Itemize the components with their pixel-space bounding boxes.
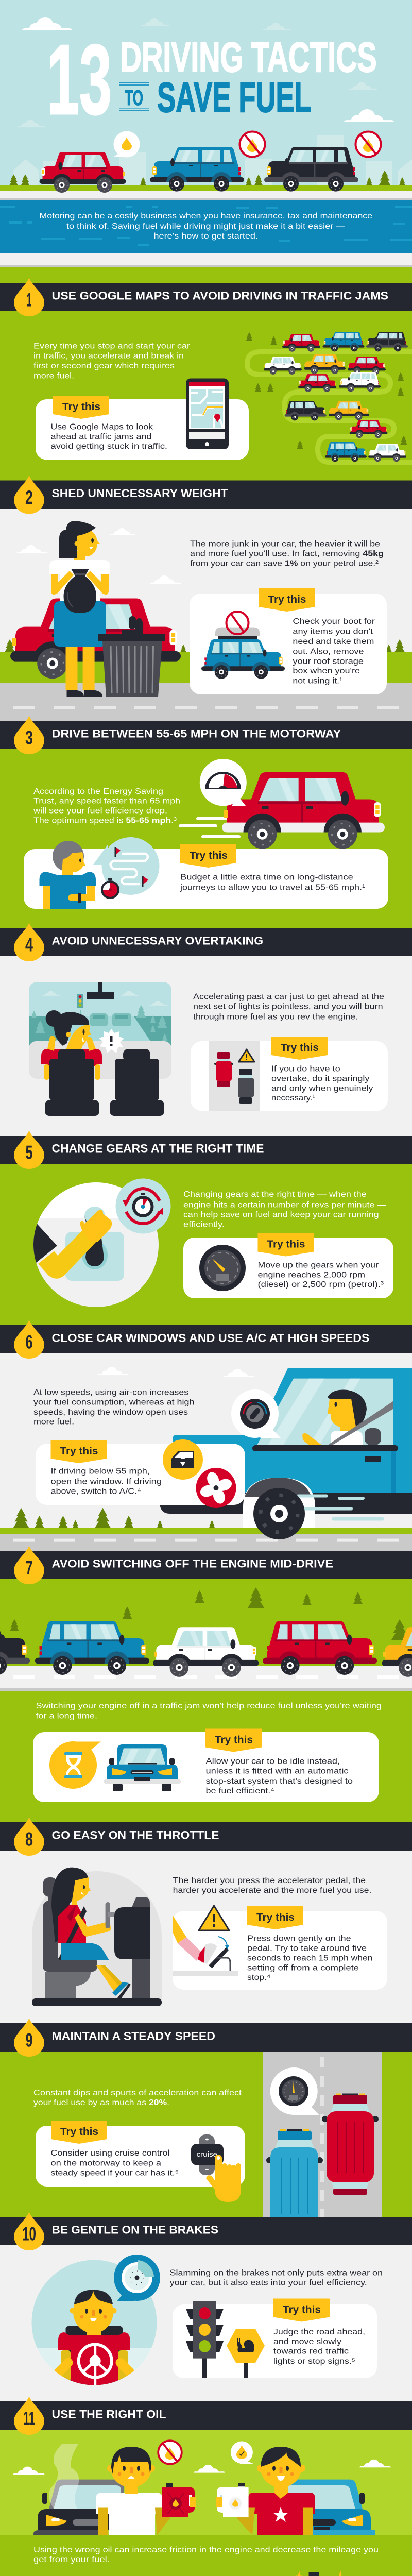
road bbox=[0, 1666, 412, 1691]
body text: Switching your engine off in a traffic jam won't help reduce fuel unless you're waiting bbox=[36, 1702, 382, 1710]
body text: your fuel consumption, whereas at high bbox=[33, 1398, 195, 1407]
number drop: 4 bbox=[25, 935, 33, 956]
try this card: Try this bbox=[60, 2126, 98, 2138]
panel: section 2 shed weight bbox=[0, 475, 412, 721]
panel: section 1 traffic jams bbox=[0, 267, 412, 481]
body text: your fuel use by as much as 20%. bbox=[33, 2098, 169, 2107]
body text: and more fuel you'll use. In fact, removing 45kg bbox=[190, 549, 384, 558]
body text: Slamming on the brakes not only puts extra wear on bbox=[170, 2268, 383, 2277]
body text: engine hits a certain number of revs per minute — bbox=[183, 1200, 386, 1209]
body text: Trust, any speed faster than 65 mph bbox=[33, 797, 180, 806]
body text bbox=[36, 1702, 382, 1720]
number drop: 2 bbox=[25, 487, 33, 508]
body text: Changing gears at the right time — when the bbox=[183, 1190, 367, 1199]
icon: phone with map bbox=[186, 378, 229, 449]
number drop: 8 bbox=[25, 1829, 33, 1850]
lane dashes bbox=[320, 2057, 324, 2217]
body text: will see your fuel efficiency drop. bbox=[33, 807, 167, 816]
happy man with white can bbox=[216, 2447, 315, 2535]
dark car with steam bbox=[33, 2444, 134, 2535]
number drop bbox=[14, 1320, 44, 1359]
body text: The optimum speed is 55-65 mph .³ bbox=[33, 816, 177, 825]
try this card: box when you're bbox=[293, 667, 360, 675]
icon: brake disc bubble bbox=[114, 2255, 160, 2301]
body text: Using the wrong oil can increase friction in the engine and decrease the mileage you bbox=[33, 2546, 379, 2554]
try this card: Try this bbox=[190, 850, 228, 861]
icon: blue oil can bbox=[290, 2570, 371, 2576]
icon: route bubble with stopwatch bbox=[93, 837, 160, 899]
rubbish bin bbox=[98, 616, 165, 697]
title: TO bbox=[125, 86, 143, 110]
body text: The more junk in your car, the heavier it will be bbox=[190, 539, 380, 548]
try this card: unless it is fitted with an automatic bbox=[206, 1767, 348, 1775]
icon: fan bbox=[196, 1468, 236, 1508]
try this card: journeys to allow you to travel at 55-65 mph.¹ bbox=[180, 883, 365, 892]
heading: MAINTAIN A STEADY SPEED bbox=[52, 2030, 215, 2042]
panel: section 4 overtaking bbox=[0, 923, 412, 1136]
number drop bbox=[14, 2018, 44, 2057]
try this card bbox=[36, 1440, 245, 1505]
body text: According to the Energy Saving bbox=[33, 787, 163, 796]
try this card: avoid getting stuck in traffic. bbox=[50, 442, 167, 451]
driver with wheel bbox=[31, 2259, 160, 2388]
number drop: 11 bbox=[23, 2408, 35, 2429]
icon: warning triangle bbox=[199, 1906, 229, 1930]
body text bbox=[33, 2546, 379, 2564]
body text: At low speeds, using air-con increases bbox=[33, 1388, 188, 1397]
clouds and trees bbox=[5, 528, 405, 652]
icon: electric window bbox=[163, 1439, 203, 1480]
try this card: Try this bbox=[215, 1734, 253, 1745]
try this card: and move slowly bbox=[273, 2337, 341, 2346]
try this card: steady speed if your car has it.⁵ bbox=[50, 2168, 179, 2177]
big red car bbox=[10, 598, 181, 679]
road and grass bbox=[0, 185, 412, 201]
try this card bbox=[33, 1729, 379, 1802]
try this card: setting off from a complete bbox=[247, 1964, 359, 1972]
icon: cruise control button: cruise bbox=[197, 2150, 217, 2158]
try this card: ahead at traffic jams and bbox=[50, 432, 151, 441]
pedal illustration bbox=[173, 1915, 238, 1976]
try this card: stop.⁴ bbox=[247, 1973, 271, 1982]
try this card: (diesel) or 2,500 rpm (petrol).³ bbox=[258, 1280, 384, 1289]
trees bbox=[10, 1587, 408, 1640]
body text: The harder you press the accelerator pedal, the bbox=[173, 1876, 366, 1885]
body text: for a long time. bbox=[36, 1711, 97, 1720]
number drop bbox=[14, 716, 44, 754]
try this card: necessary.¹ bbox=[271, 1094, 315, 1103]
number drop bbox=[14, 278, 44, 316]
body text: first or second gear which requires bbox=[33, 362, 175, 370]
body text: speeds, having the window open uses bbox=[33, 1408, 188, 1417]
heading bbox=[0, 1325, 412, 1353]
heading bbox=[0, 2217, 412, 2245]
panel: section 11 right oil bbox=[0, 2396, 412, 2576]
body text: from your car can save 1% on your petrol use.² bbox=[190, 560, 379, 568]
heading bbox=[0, 1822, 412, 1851]
icon: rev counter bbox=[199, 1245, 246, 1291]
try this card: and only when genuinely bbox=[271, 1084, 373, 1093]
gear stick illustration bbox=[33, 1182, 159, 1308]
number drop bbox=[14, 923, 44, 961]
number drop bbox=[14, 1130, 44, 1169]
icon: air con dial bubble bbox=[231, 1389, 281, 1438]
heading bbox=[0, 283, 412, 311]
road dashes bbox=[13, 1539, 399, 1542]
icon: cruise control button: + bbox=[205, 2136, 209, 2143]
try this card: lights or stop signs.⁵ bbox=[273, 2357, 355, 2366]
icon: hourglass bubble bbox=[49, 1741, 101, 1789]
try this card: seconds to reach 15 mph when bbox=[247, 1954, 373, 1962]
icon: good oil bubble bbox=[231, 2441, 253, 2464]
heading: USE THE RIGHT OIL bbox=[52, 2408, 166, 2420]
try this card: If you do have to bbox=[271, 1065, 340, 1074]
try this card bbox=[36, 396, 249, 460]
body text: efficiently. bbox=[183, 1221, 225, 1229]
skyline buildings bbox=[13, 135, 412, 185]
try this card: towards red traffic bbox=[273, 2347, 349, 2356]
try this card: Budget a little extra time on long-distance bbox=[180, 873, 353, 882]
icon: car front view bbox=[104, 1744, 181, 1791]
number drop bbox=[14, 2396, 44, 2435]
intro text bbox=[39, 212, 372, 241]
panel: section 8 throttle bbox=[0, 1817, 412, 2023]
try this card bbox=[191, 1037, 388, 1111]
body text: Accelerating past a car just to get ahead at the bbox=[193, 992, 384, 1002]
try this card: Try this bbox=[62, 401, 100, 413]
red car bbox=[222, 772, 385, 849]
try this card: Move up the gears when your bbox=[258, 1261, 379, 1269]
try this card bbox=[183, 1233, 393, 1298]
icon: alert burst bbox=[99, 1029, 124, 1053]
try this card: engine reaches 2,000 rpm bbox=[258, 1270, 365, 1279]
heading bbox=[0, 928, 412, 956]
icon: no fuel signs bbox=[240, 132, 381, 157]
panel: hero header bbox=[0, 0, 412, 201]
try this card: Try this bbox=[283, 2304, 321, 2315]
worried man with red can bbox=[96, 2447, 196, 2535]
heading: SHED UNNECESSARY WEIGHT bbox=[52, 487, 228, 500]
number drop: 5 bbox=[26, 1142, 33, 1163]
car: blue suv bbox=[150, 147, 244, 192]
try this card: your roof storage bbox=[293, 657, 364, 666]
icon: fuel bubble bbox=[113, 131, 140, 158]
try this card: overtake, do it sparingly bbox=[271, 1074, 369, 1083]
heading: CHANGE GEARS AT THE RIGHT TIME bbox=[52, 1142, 264, 1155]
try this card: Use Google Maps to look bbox=[50, 422, 153, 432]
try this card: Try this bbox=[267, 1239, 305, 1250]
icon: stopwatch with arrows bbox=[115, 1179, 171, 1233]
body text bbox=[33, 1388, 195, 1426]
body text bbox=[190, 539, 384, 568]
icon: warning triangle bbox=[239, 1049, 254, 1062]
icon: cruise control button bbox=[191, 2134, 241, 2202]
heading: AVOID SWITCHING OFF THE ENGINE MID-DRIVE bbox=[52, 1557, 333, 1570]
heading bbox=[0, 721, 412, 749]
heading: CLOSE CAR WINDOWS AND USE A/C AT HIGH SPEEDS bbox=[52, 1331, 370, 1345]
road dashes bbox=[13, 706, 399, 709]
clouds and trees bbox=[13, 1367, 254, 1528]
try this card bbox=[24, 844, 388, 909]
try this card: Try this bbox=[281, 1042, 319, 1054]
try this card: need and take them bbox=[293, 637, 374, 646]
panel: intro band bbox=[0, 200, 412, 267]
number drop bbox=[14, 475, 44, 514]
trees bbox=[246, 332, 407, 449]
body text bbox=[33, 2089, 242, 2107]
panel: section 10 brakes bbox=[0, 2212, 412, 2401]
panel: section 3 motorway speed bbox=[0, 716, 412, 928]
car: red sedan bbox=[39, 152, 126, 193]
driver bbox=[41, 1010, 164, 1116]
try this card bbox=[36, 2570, 379, 2576]
number drop: 9 bbox=[26, 2030, 33, 2051]
heading bbox=[0, 1551, 412, 1579]
intro text: Motoring can be a costly business when you have insurance, tax and maintenance bbox=[39, 212, 372, 221]
panel: section 6 windows and air con bbox=[0, 1320, 412, 1551]
body text: through more fuel as you rev the engine. bbox=[193, 1012, 358, 1021]
body text: Constant dips and spurts of acceleration can affect bbox=[33, 2089, 242, 2097]
body text: in traffic, you accelerate and break in bbox=[33, 351, 184, 361]
try this card: not using it.¹ bbox=[293, 676, 342, 685]
icon: cruise control button: − bbox=[205, 2165, 209, 2173]
body text bbox=[173, 1876, 371, 1895]
big blue car with driver bbox=[160, 1368, 412, 1539]
heading: USE GOOGLE MAPS TO AVOID DRIVING IN TRAFFIC JAMS bbox=[52, 290, 388, 302]
title: SAVE FUEL bbox=[157, 74, 312, 121]
title: 13 bbox=[47, 24, 112, 135]
try this card: Consider using cruise control bbox=[50, 2149, 170, 2158]
panel: section 5 change gears bbox=[0, 1130, 412, 1325]
heading bbox=[0, 1136, 412, 1164]
heading: DRIVE BETWEEN 55-65 MPH ON THE MOTORWAY bbox=[52, 727, 341, 740]
try this card bbox=[36, 2121, 245, 2202]
number drop bbox=[14, 2212, 44, 2250]
body text bbox=[170, 2268, 383, 2287]
body text: can help save on fuel and keep your car running bbox=[183, 1211, 379, 1219]
heading bbox=[0, 480, 412, 509]
blue car from above bbox=[266, 2129, 323, 2217]
clouds bbox=[18, 17, 394, 127]
body text bbox=[33, 787, 180, 825]
queue of cars bbox=[0, 1621, 412, 1677]
try this card: above, switch to A/C.⁴ bbox=[50, 1487, 141, 1496]
blue car bbox=[286, 2480, 375, 2535]
winding road bbox=[247, 352, 412, 462]
body text bbox=[193, 992, 384, 1021]
number drop bbox=[14, 1817, 44, 1856]
woman with rubbish bag bbox=[49, 521, 110, 697]
number drop: 3 bbox=[25, 727, 33, 749]
try this card: Press down gently on the bbox=[247, 1934, 351, 1943]
panel: section 7 engine mid-drive bbox=[0, 1546, 412, 1822]
body text: more fuel. bbox=[33, 1417, 74, 1426]
try this card: Try this bbox=[60, 1446, 98, 1457]
trees bbox=[9, 171, 405, 185]
try this card: Allow your car to be idle instead, bbox=[206, 1757, 340, 1766]
icon: speedometer bubble bbox=[270, 2067, 319, 2115]
heading: GO EASY ON THE THROTTLE bbox=[52, 1829, 219, 1841]
try this card: out. Also, remove bbox=[293, 647, 364, 656]
icon: snail sign bbox=[227, 2329, 265, 2378]
try this card bbox=[173, 1906, 387, 1990]
icon: speedometer bubble bbox=[200, 759, 247, 806]
icon: overtaking cars bbox=[214, 1052, 254, 1104]
try this card bbox=[173, 2299, 377, 2378]
man checking watch bbox=[39, 841, 96, 909]
number drop: 1 bbox=[27, 290, 32, 311]
number drop: 7 bbox=[26, 1557, 33, 1579]
heading bbox=[0, 2023, 412, 2052]
try this card bbox=[190, 588, 387, 694]
panel: section 9 steady speed bbox=[0, 2018, 412, 2217]
red car from above bbox=[322, 2094, 379, 2195]
body text bbox=[183, 1190, 386, 1229]
title bbox=[47, 24, 377, 135]
body text: harder you accelerate and the more fuel you use. bbox=[173, 1886, 371, 1895]
intro text: here's how to get started. bbox=[153, 232, 258, 241]
number drop: 10 bbox=[22, 2224, 36, 2245]
body text: next set of lights is pointless, and you will burn bbox=[193, 1002, 383, 1011]
car: black suv bbox=[264, 147, 358, 192]
body text bbox=[33, 342, 191, 380]
try this card: open the window. If driving bbox=[50, 1477, 162, 1486]
heading bbox=[0, 2401, 412, 2430]
try this card: Judge the road ahead, bbox=[273, 2328, 365, 2336]
traffic jam cars bbox=[264, 332, 408, 462]
try this card: be fuel efficient.⁴ bbox=[206, 1787, 274, 1795]
number drop bbox=[14, 1546, 44, 1584]
try this card: Check your boot for bbox=[293, 617, 375, 626]
windscreen view bbox=[29, 982, 171, 1079]
icon: car with roof box bbox=[201, 612, 285, 679]
speed lines bbox=[179, 817, 241, 838]
body text: Every time you stop and start your car bbox=[33, 342, 191, 350]
intro text: to think of. Saving fuel while driving might just make it a bit easier — bbox=[66, 222, 345, 231]
clouds bbox=[13, 2460, 391, 2475]
try this card: Try this bbox=[268, 594, 306, 605]
icon: traffic light bbox=[186, 2301, 224, 2378]
number drop: 6 bbox=[26, 1332, 33, 1353]
try this card: Try this bbox=[256, 1912, 295, 1923]
try this card: any items you don't bbox=[293, 627, 373, 636]
body text: more fuel. bbox=[33, 372, 74, 380]
heading: BE GENTLE ON THE BRAKES bbox=[52, 2224, 218, 2236]
icon: no sign bubble bbox=[158, 2441, 182, 2464]
body text: get from your fuel. bbox=[33, 2555, 110, 2564]
heading: AVOID UNNECESSARY OVERTAKING bbox=[52, 935, 263, 947]
body text: your car, but it also eats into your fuel efficiency. bbox=[170, 2278, 367, 2287]
try this card: If driving below 55 mph, bbox=[50, 1467, 150, 1476]
try this card: pedal. Try to take around five bbox=[247, 1944, 367, 1953]
driver in seat bbox=[32, 1868, 162, 2006]
try this card: on the motorway to keep a bbox=[50, 2159, 161, 2167]
try this card: stop-start system that's designed to bbox=[206, 1777, 353, 1786]
